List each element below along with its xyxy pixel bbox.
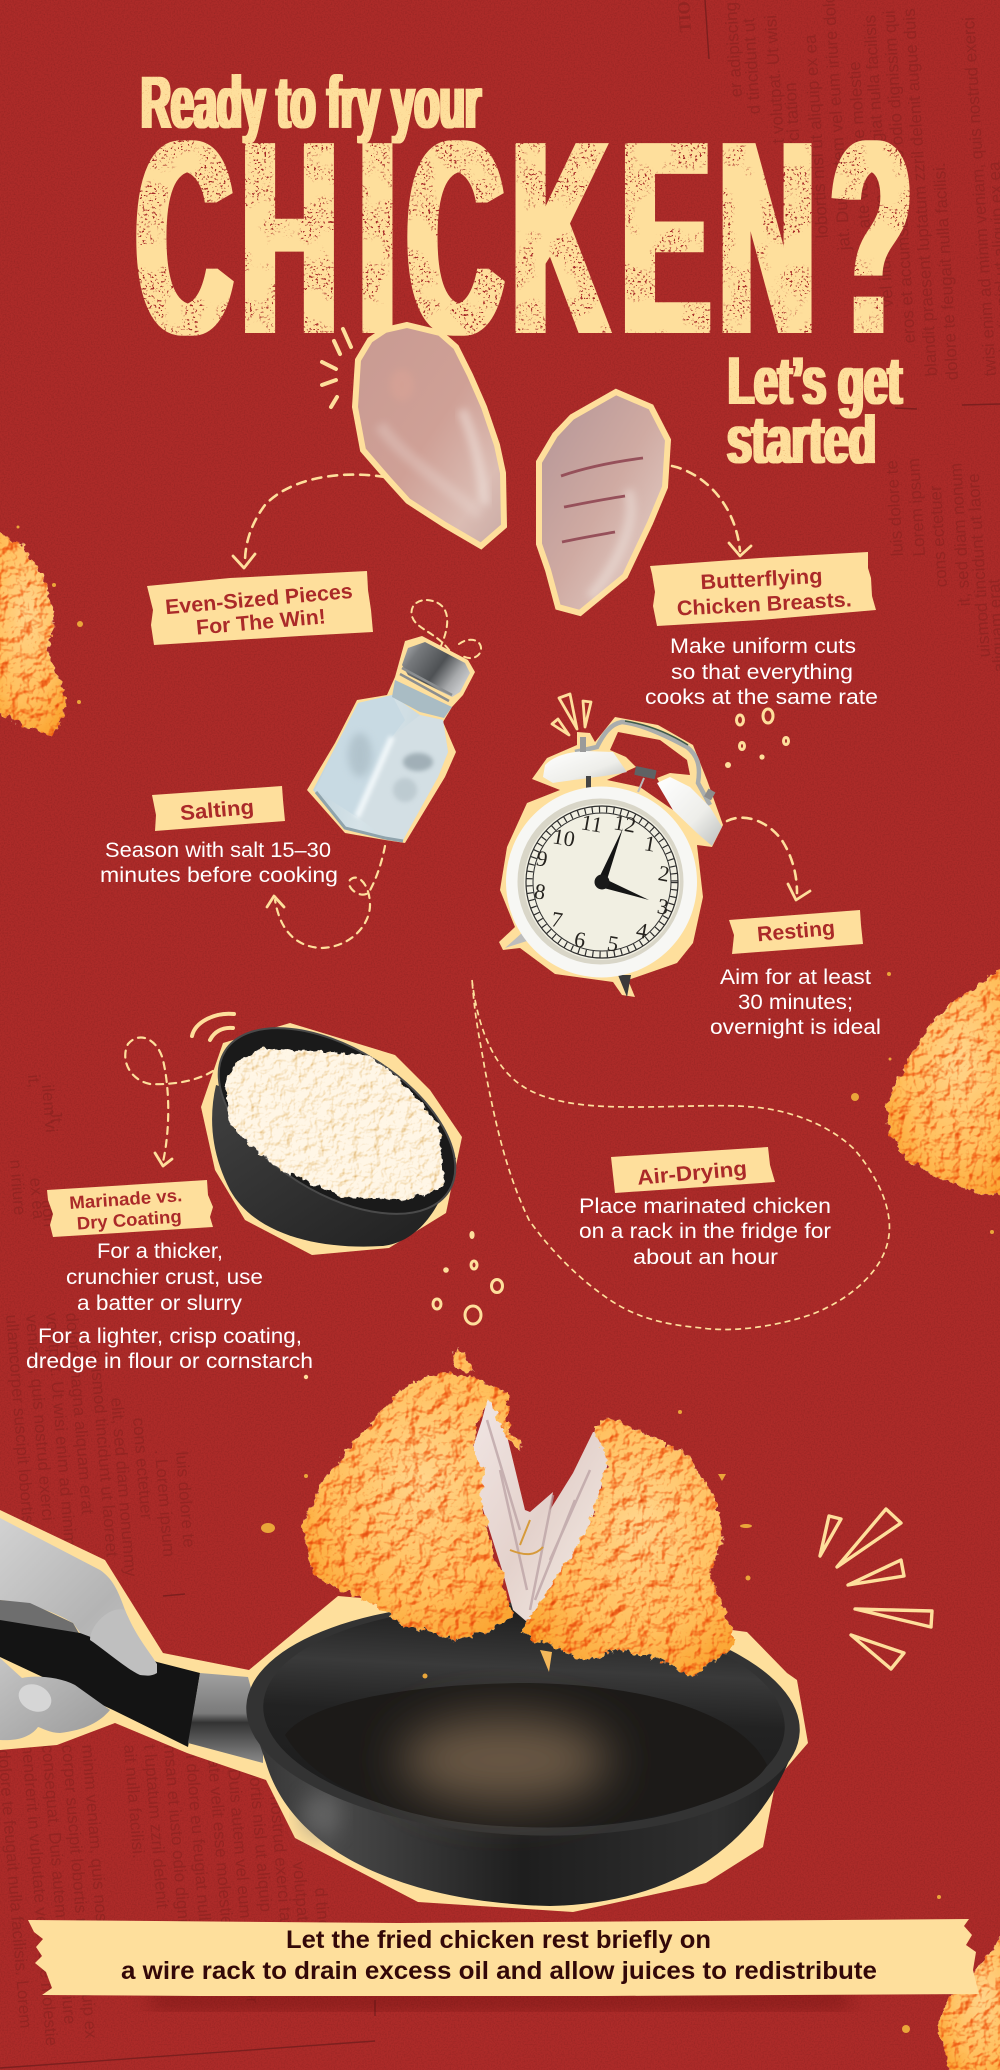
label: marinade vs dry coating: Marinade vs. xyxy=(69,1185,183,1213)
shaker body xyxy=(313,695,448,840)
text: marinade description: For a lighter, crisp coating, xyxy=(38,1325,302,1348)
newspaper text: left and bottom: Jt xyxy=(46,1109,66,1124)
clock numerals: 9 xyxy=(534,845,550,872)
photo: raw chicken breast xyxy=(355,325,504,546)
newspaper text: top right: vel illum dolore eu feugiat nulla facilisis xyxy=(860,14,897,308)
newspaper text: left and bottom: si xyxy=(54,1224,74,1238)
title xyxy=(136,61,912,478)
bowl rim xyxy=(187,990,487,1252)
clock handle xyxy=(575,722,710,805)
chicken right half xyxy=(520,1417,737,1677)
text: marinade description: crunchier crust, use xyxy=(66,1266,263,1289)
text: salting description: Season with salt 15–30 xyxy=(105,839,331,862)
newspaper text: left and bottom: euismod tincidunt ut laoreet xyxy=(86,1349,122,1558)
clock face xyxy=(518,798,684,964)
text: butterflying description: so that everything xyxy=(671,661,853,684)
text: salting description: minutes before cooking xyxy=(100,864,338,887)
clock numerals: 3 xyxy=(655,893,671,920)
text: air-drying description: Place marinated chicken xyxy=(579,1195,831,1218)
newspaper text: top right: dolore te feugait nulla facilisi. xyxy=(930,162,962,381)
clock numerals: 4 xyxy=(634,917,650,944)
label: even-sized pieces: For The Win! xyxy=(195,605,327,640)
newspaper text: left and bottom: msan et iusto odio dignissim qui xyxy=(160,1744,198,1986)
label: even-sized pieces: Even-Sized Pieces xyxy=(164,580,354,619)
banner: final tip xyxy=(28,1919,979,1996)
newspaper text: left and bottom: m dolore eu feugiat nulla s at xyxy=(181,1744,217,1963)
clock numerals: 2 xyxy=(656,860,672,887)
newspaper text: left and bottom: consequat. Duis autem vel eum iriure xyxy=(38,1744,79,2025)
text: marinade description: dredge in flour or cornstarch xyxy=(26,1350,313,1373)
newspaper text: left and bottom xyxy=(0,1074,375,2068)
newspaper text: left and bottom: volutpat xyxy=(289,1861,313,1922)
newspaper text: top right: t volutpat. Ut wisi xyxy=(761,14,788,144)
newspaper text: top right: it, sed diam nonum xyxy=(946,462,974,607)
arrow: dashed from salt shaker loop xyxy=(267,846,385,948)
text: air-drying description xyxy=(579,1195,831,1269)
arrow: left dashed to even-sized label xyxy=(233,475,385,568)
index fingertip xyxy=(90,1609,157,1676)
chicken flesh xyxy=(473,1397,610,1627)
clock numerals: 10 xyxy=(551,823,577,852)
photo: salt shaker xyxy=(307,636,475,843)
text: resting description: overnight is ideal xyxy=(710,1016,881,1039)
banner shadow xyxy=(150,1994,850,2006)
subtitle: let's get started xyxy=(727,343,902,478)
newspaper text: top right: cons ectetuer xyxy=(926,485,951,588)
icon: bubbles above pan xyxy=(304,1231,502,1379)
label: marinade vs dry coating: Dry Coating xyxy=(76,1206,182,1234)
text: air-drying description: on a rack in the fridge for xyxy=(579,1220,831,1243)
newspaper text: left and bottom: d tincidunt xyxy=(311,1887,336,1966)
newspaper text: left and bottom: lobortis nisl ut aliquip xyxy=(244,1754,276,1913)
cut-out outline xyxy=(0,1510,808,1912)
pan rim xyxy=(241,1590,805,1848)
icon: burst lines near breast xyxy=(322,329,351,407)
text: butterflying description: Make uniform cuts xyxy=(670,635,856,658)
pan metal bracket xyxy=(188,1673,263,1763)
newspaper text: top right: twisi enim ad minim veniam, quis nostrud exerci xyxy=(959,16,1000,377)
subtitle: let's get started: Let’s get xyxy=(728,343,902,419)
newspaper text: left and bottom: it, xyxy=(24,1074,44,1089)
shaker cap xyxy=(402,642,470,697)
text: resting description: 30 minutes; xyxy=(738,991,853,1014)
photo: bowl of breadcrumbs xyxy=(187,990,487,1255)
text: air-drying description: about an hour xyxy=(633,1246,778,1269)
pan body xyxy=(247,1706,799,1906)
arrow: dashed air-drying loop xyxy=(472,980,889,1329)
clock numerals: 5 xyxy=(605,930,621,957)
newspaper text: left and bottom: ex ea xyxy=(26,1177,48,1220)
newspaper text: left and bottom: . Lorem ipsum xyxy=(151,1449,179,1558)
newspaper text: top right: lobortis nisl ut aliquip ex ea xyxy=(801,33,832,239)
newspaper text: top right: luis dolore te xyxy=(882,460,907,557)
oil in pan xyxy=(400,1716,610,1804)
arrow: dashed loop to marinade label xyxy=(125,1037,213,1166)
label: even-sized pieces xyxy=(147,571,373,645)
text: marinade description: For a thicker, xyxy=(97,1240,223,1263)
clock rim xyxy=(506,786,697,978)
text: marinade description xyxy=(26,1240,313,1373)
clock numerals: 11 xyxy=(579,809,605,838)
newspaper text: left and bottom: dolore magna aliquam erat xyxy=(62,1312,97,1515)
newspaper text: top right: nostrud exerci tation xyxy=(781,82,809,236)
newspaper text: left and bottom: luis dolore te xyxy=(172,1451,199,1548)
text: salting description xyxy=(100,839,338,887)
newspaper text: left and bottom: n iriiure xyxy=(6,1159,29,1216)
pan inner wall xyxy=(258,1595,790,1839)
title line: ready to fry your: Ready to fry your xyxy=(141,61,481,144)
title word: chicken: CHICKEN? xyxy=(136,83,912,392)
newspaper text: left and bottom: utate velit esse molestie xyxy=(203,1744,237,1926)
icon: clock rays xyxy=(552,694,591,735)
text: marinade description: a batter or slurry xyxy=(77,1292,243,1315)
clock feet xyxy=(505,932,527,948)
text: butterflying description: cooks at the same rate xyxy=(645,686,878,709)
photo: torn fried chicken xyxy=(302,1347,737,1677)
newspaper text: left and bottom: hendrerit in vulputate velit esse molestie xyxy=(18,1744,61,2047)
icon: rays beside pan xyxy=(820,1509,932,1669)
thumb and finger xyxy=(0,1658,110,1740)
banner: final tip: a wire rack to drain excess oil and allow juices to redistribute xyxy=(121,1957,877,1985)
newspaper text: top right: blandit praesent luptatum zzril delenit augue duis xyxy=(900,8,941,377)
photo: fried chicken bottom right xyxy=(938,1935,1000,2070)
icon: dashed loop above salt shaker xyxy=(411,600,481,658)
chicken left half xyxy=(302,1372,522,1640)
shaker neck xyxy=(392,680,452,718)
newspaper text: left and bottom: ilem vi xyxy=(38,1084,61,1133)
breadcrumbs xyxy=(226,1048,443,1200)
clock bells xyxy=(543,751,627,783)
label: salting xyxy=(152,786,285,831)
newspaper text: left and bottom: t luptatum zzril delenit xyxy=(140,1744,172,1909)
label: butterflying chicken breasts xyxy=(650,552,876,626)
newspaper text: top right: ate velit esse molestie xyxy=(845,61,874,229)
arrow: right dashed to butterflying label xyxy=(672,466,751,556)
newspaper text: left and bottom: volutpat. Ut wisi enim ad minim xyxy=(42,1312,80,1547)
bowl body xyxy=(212,1085,456,1247)
label: salting: Salting xyxy=(179,796,255,825)
subtitle: let's get started: started xyxy=(727,402,876,478)
icon: arcs above bowl xyxy=(192,1014,234,1040)
clock numerals xyxy=(532,809,672,957)
text: resting description: Aim for at least xyxy=(720,966,871,989)
newspaper text: left and bottom: minim veniam, quis nost xyxy=(78,1744,112,1927)
text: butterflying description xyxy=(645,635,878,709)
chicken drip xyxy=(540,1650,552,1672)
clock numerals: 6 xyxy=(572,926,588,953)
newspaper text: left and bottom: veniam, quis nostrud exerci xyxy=(22,1314,58,1522)
clock numerals: 1 xyxy=(642,830,658,857)
photo: fried chicken left edge xyxy=(0,530,67,735)
text: resting description xyxy=(710,966,881,1039)
label: butterflying chicken breasts: Chicken Breasts. xyxy=(676,588,852,621)
photo: fried chicken right edge xyxy=(885,965,1000,1197)
newspaper text: left and bottom: uis nostrud exerci tating xyxy=(264,1769,297,1949)
chicken fragment xyxy=(452,1347,473,1373)
newspaper text: left and bottom: ait nulla facilisi. xyxy=(120,1744,148,1859)
label: resting xyxy=(729,910,863,954)
photo: alarm clock xyxy=(499,717,723,997)
newspaper text: left and bottom: corper suscipit lobortis nisl ut aliquip ex xyxy=(58,1744,101,2040)
clock hands xyxy=(598,828,623,883)
newspaper text: top right: uismod tincidunt ut laore xyxy=(964,473,994,658)
clock numerals: 7 xyxy=(549,906,565,933)
photo: pan with hand xyxy=(0,1510,808,1912)
newspaper text: top right xyxy=(673,0,1000,673)
icon: bubbles near clock xyxy=(725,709,788,768)
newspaper text: top right: Lorem ipsum xyxy=(904,458,929,557)
label: air-drying xyxy=(611,1147,775,1193)
clock numerals: 12 xyxy=(612,809,638,838)
photo: butterflied chicken breast xyxy=(539,392,668,613)
label: air-drying: Air-Drying xyxy=(636,1157,748,1190)
label: butterflying chicken breasts: Butterflying xyxy=(700,565,823,594)
label: resting: Resting xyxy=(756,917,836,946)
newspaper text: left and bottom: ullamcorper suscipit lobortis nisl xyxy=(2,1314,40,1555)
banner: final tip: Let the fried chicken rest briefly on xyxy=(286,1926,711,1954)
arrow: dashed to resting label xyxy=(727,818,810,900)
newspaper text: left and bottom: elit, sed diam nonummy xyxy=(107,1397,140,1578)
hand back xyxy=(0,1518,157,1675)
newspaper text: left and bottom: t. Duis autem vel eum iriure dolor xyxy=(223,1754,262,2004)
newspaper text: left and bottom: tion xyxy=(38,1199,59,1228)
crumbs xyxy=(16,526,994,2033)
newspaper text: left and bottom: cons ectetuer xyxy=(129,1417,156,1520)
pan floor xyxy=(285,1683,767,1827)
label: marinade vs dry coating xyxy=(47,1180,213,1237)
clock numerals: 8 xyxy=(532,878,548,905)
newspaper text: top right: d tincidunt ut xyxy=(739,17,764,115)
newspaper text: top right: eros et accumsan et iusto odio dignissim qui xyxy=(880,10,919,344)
pan handle xyxy=(0,1620,200,1747)
